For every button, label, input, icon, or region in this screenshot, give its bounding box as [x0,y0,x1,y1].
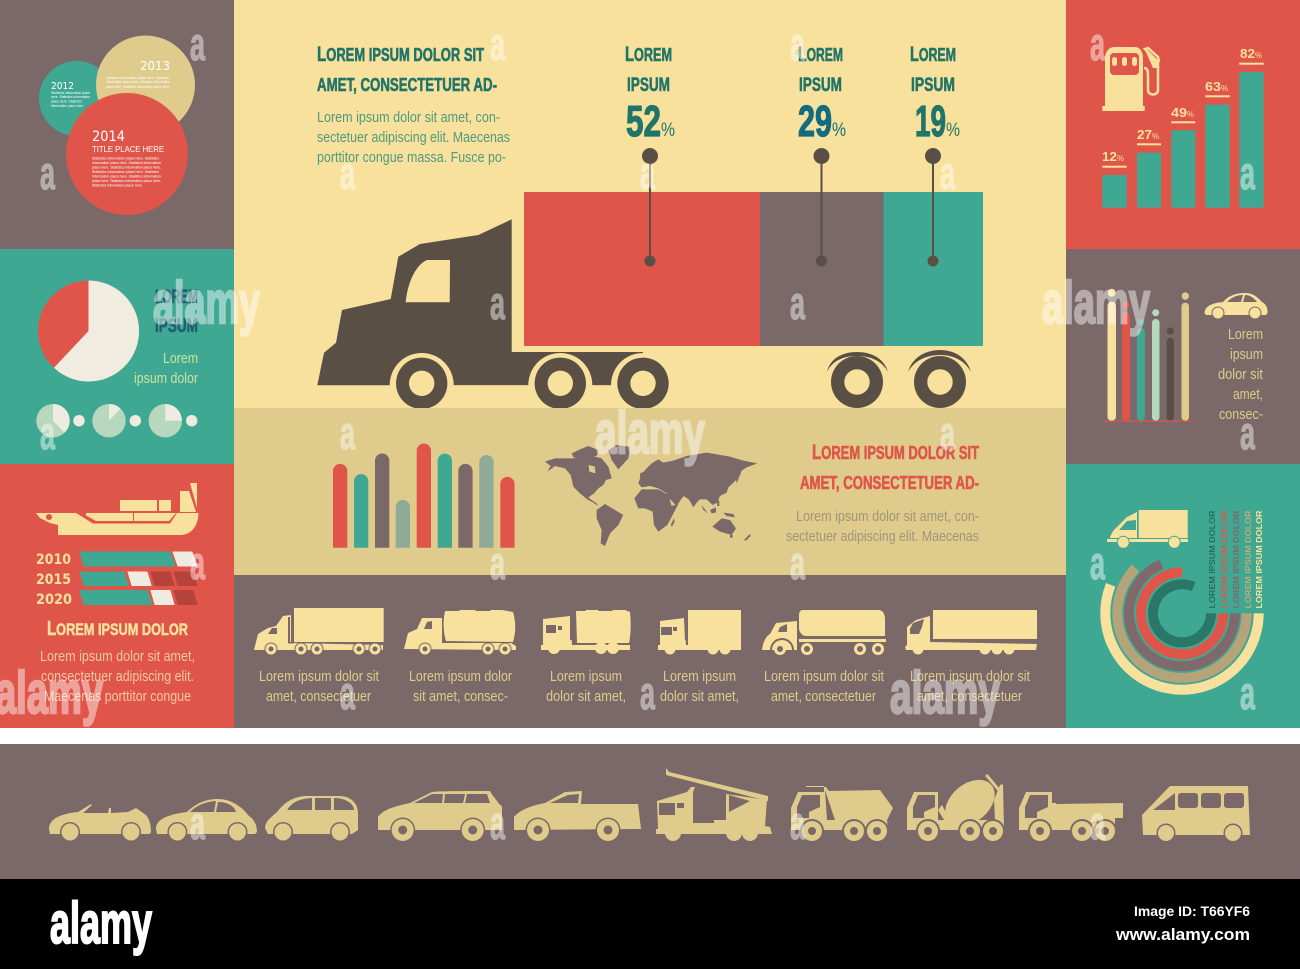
bar: 63%: 63 [1205,79,1221,94]
lollipop chart [1102,289,1194,422]
icon: cement mixer [907,768,1007,843]
watermarks: a [1240,407,1255,459]
watermarks: a [1240,147,1255,199]
truck 6 caption [910,669,1030,705]
watermarks: a [190,18,205,70]
watermarks: alamy [595,400,705,466]
map heading [800,441,979,493]
bar: 63%: % [1221,84,1228,93]
truck 1 caption: amet, consectetuer [266,689,371,705]
bar: 27%: 27 [1137,127,1152,142]
truck 1 caption [259,669,379,705]
pie heading: IPSUM [155,316,198,337]
watermarks: a [190,797,205,849]
watermarks: a [340,407,355,459]
watermarks: a [1240,667,1255,719]
pie heading: LOREM [155,287,198,308]
truck 2 caption: sit amet, consec- [413,689,508,705]
watermarks: a [490,537,505,589]
watermarks: a [190,277,205,329]
circle 2014: place here. Statistics information place here. [92,179,161,183]
ship body text: Maecenas porttitor congue [44,688,191,705]
pie caption: Lorem [163,350,198,367]
car caption: Lorem [1228,327,1263,343]
main body text: Lorem ipsum dolor sit amet, con- [317,109,500,126]
circle 2013 [96,36,195,134]
radial legend: LOREM IPSUM DOLOR [1243,510,1253,608]
circle 2013: place here. Statistics information place here. [106,85,170,89]
circle 2014: place here. Statistics information place here. [92,166,161,170]
bar: 27% [1137,127,1161,208]
panel: truck types [234,575,1066,728]
radial chart [1105,564,1259,690]
panel: timeline circles [0,0,234,249]
circle 2012: information place here. [51,104,84,108]
stat: 29%: IPSUM [799,75,842,96]
icon: delivery van [1107,510,1188,549]
watermarks: a [340,667,355,719]
site url: www.alamy.com [1115,925,1250,944]
watermarks: a [490,277,505,329]
panel: thin bars and car [1066,249,1300,464]
footer bar [0,879,1300,969]
icon: convertible [49,804,151,842]
pie caption [134,350,198,387]
radial legend: LOREM IPSUM DOLOR [1254,510,1264,608]
circle 2014: information place here. Statistics information [92,174,161,178]
car caption [1218,327,1263,423]
stat: 52% [625,43,675,146]
car caption: dolor sit [1218,367,1263,383]
stat: 19% [910,43,960,146]
radial legend: LOREM IPSUM DOLOR [1231,510,1241,608]
bar: 27%: % [1152,132,1159,141]
icon: flatbed truck [1019,792,1123,843]
watermarks: alamy [153,270,260,336]
radial legend [1207,510,1264,608]
watermarks: a [190,537,205,589]
main heading: AMET, CONSECTETUER AD- [317,75,497,95]
watermarks: a [1090,537,1105,589]
truck 3 caption: Lorem ipsum [550,669,622,685]
circle 2012: Statistics information place [51,91,90,95]
bar: 82%: 82 [1240,46,1255,61]
stat: 19%: % [946,120,960,141]
icon: truck cab [317,219,689,417]
circle 2012: here. Statistics information [51,95,90,99]
icon: dump truck [791,786,893,843]
map body text: Lorem ipsum dolor sit amet, con- [796,508,979,525]
stat: 52%: 52 [626,97,661,146]
icon: semi truck [254,608,384,656]
main body text [317,109,510,166]
icon: minivan [265,796,358,842]
bar: 49% [1171,105,1195,208]
watermarks: a [640,667,655,719]
watermarks: a [790,537,805,589]
circle 2012 [39,61,114,136]
timeline bar: 2020: 2020 [36,592,72,608]
icon: cargo ship [36,483,198,535]
ship body text [40,648,195,705]
ship heading: LOREM IPSUM DOLOR [47,618,188,640]
panel: vehicle strip [0,744,1300,879]
stat: 52%: IPSUM [627,75,670,96]
truck 3 caption [546,669,626,705]
truck 6 caption: Lorem ipsum dolor sit [910,669,1030,685]
truck 2 caption [409,669,512,705]
car caption: amet, [1233,387,1263,403]
panel: radial chart and van [1066,464,1300,728]
circle 2013: Statistics information place here. Statistics [106,76,169,80]
circle 2014: Statistics information place here. Statistics [92,156,159,160]
circle 2012: 2012 [51,81,74,92]
panel: ship and timeline [0,464,234,728]
map body text: sectetuer adipiscing elit. Maecenas [786,528,979,545]
timeline bar: 2020 [36,590,197,608]
ship body text: Lorem ipsum dolor sit amet, [40,648,195,665]
stat: 29%: % [832,120,846,141]
rounded bar chart [333,444,515,548]
circle 2014: Statistics information place here. Statistics [92,170,159,174]
panel: pie charts [0,249,234,464]
stat: 19%: 19 [915,97,946,146]
pie caption: ipsum dolor [134,370,198,387]
icon: trailer wheels [827,350,971,408]
circle 2014: 2014 [92,129,125,145]
map heading: AMET, CONSECTETUER AD- [800,473,979,493]
radial legend: LOREM IPSUM DOLOR [1207,510,1217,608]
circle 2014: Statistics information place here. [92,184,143,188]
timeline bar: 2010: 2010 [36,552,71,568]
panel: map and bars [234,408,1066,575]
icon: box tanker truck [541,610,631,654]
stat: 19%: IPSUM [911,75,955,96]
truck 5 caption: amet, consectetuer [771,689,876,705]
footer logo: alamy [50,891,152,956]
truck 4 caption: Lorem ipsum [663,669,736,685]
panel: fuel bar chart [1066,0,1300,249]
main body text: porttitor congue massa. Fusce po- [317,149,506,166]
watermarks: a [790,277,805,329]
panel: truck hero [234,0,1066,417]
large pie chart [38,280,139,382]
bar: 49%: % [1187,110,1194,119]
watermarks: a [490,797,505,849]
bar: 12%: 12 [1102,149,1117,164]
car caption: ipsum [1230,347,1263,363]
radial legend: LOREM IPSUM DOLOR [1219,510,1229,608]
bar: 82%: % [1255,51,1262,60]
circle 2014: information place here. Statistics information [92,161,161,165]
stat: 19%: LOREM [910,43,956,66]
stat: 29%: LOREM [798,43,843,66]
stat: 29% [798,43,846,146]
truck 5 caption [764,669,884,705]
map body text [786,508,979,545]
pin pointers [642,148,941,266]
small pie row [36,404,197,437]
watermarks: a [790,797,805,849]
circle 2013: 2013 [140,59,170,73]
watermarks: alamy [890,660,1000,726]
circle 2014: TITLE PLACE HERE [92,145,164,154]
watermarks: a [940,407,955,459]
truck 1 caption: Lorem ipsum dolor sit [259,669,379,685]
main body text: sectetuer adipiscing elit. Maecenas [317,129,510,146]
car caption: consec- [1219,407,1263,423]
truck 2 caption: Lorem ipsum dolor [409,669,512,685]
icon: station wagon [378,791,502,842]
icon: box truck [658,610,741,654]
truck 4 caption: dolor sit amet, [660,689,739,705]
ship body text: consectetuer adipiscing elit. [41,668,194,685]
map heading: LOREM IPSUM DOLOR SIT [812,441,979,464]
circle 2013: information place here. Statistics information [106,80,170,84]
bar: 82% [1239,46,1264,208]
circle 2014 [66,93,188,215]
icon: pickup [514,791,641,842]
watermarks: a [940,147,955,199]
bar: 63% [1205,79,1230,208]
watermarks: a [1090,797,1105,849]
icon: fuel pump [1102,47,1159,111]
icon: box trailer truck [905,610,1037,654]
bar: 12% [1102,149,1127,208]
icon: covered trailer truck [762,610,886,655]
truck 5 caption: Lorem ipsum dolor sit [764,669,884,685]
bar: 12%: % [1117,154,1124,163]
watermarks: a [490,18,505,70]
truck 3 caption: dolor sit amet, [546,689,626,705]
watermarks: a [40,147,55,199]
watermarks: alamy [0,660,103,726]
watermarks: a [1090,18,1105,70]
watermarks: a [790,18,805,70]
stat: 52%: LOREM [625,43,672,66]
truck 6 caption: amet, consectetuer [917,689,1022,705]
timeline bar: 2015 [36,572,197,588]
image id: Image ID: T66YF6 [1134,903,1250,919]
icon: tanker truck [404,610,516,656]
stat: 29%: 29 [798,97,832,146]
circle 2012: place here. Statistics [51,100,82,104]
truck cargo segments [524,192,983,346]
timeline bar: 2015: 2015 [36,572,71,588]
icon: hatchback [156,799,257,842]
icon: car [1204,293,1268,320]
watermarks: alamy [1042,270,1150,336]
watermarks: a [340,147,355,199]
timeline bar: 2010 [36,552,197,568]
truck 4 caption [660,669,739,705]
watermarks: a [640,147,655,199]
main heading: LOREM IPSUM DOLOR SIT [317,43,484,66]
pie heading [155,287,198,337]
bar: 49%: 49 [1171,105,1187,120]
icon: crane truck [656,768,772,841]
stat: 52%: % [661,120,675,141]
main heading [317,43,497,95]
world map [545,445,757,546]
watermarks: a [40,407,55,459]
icon: passenger van [1142,786,1250,842]
